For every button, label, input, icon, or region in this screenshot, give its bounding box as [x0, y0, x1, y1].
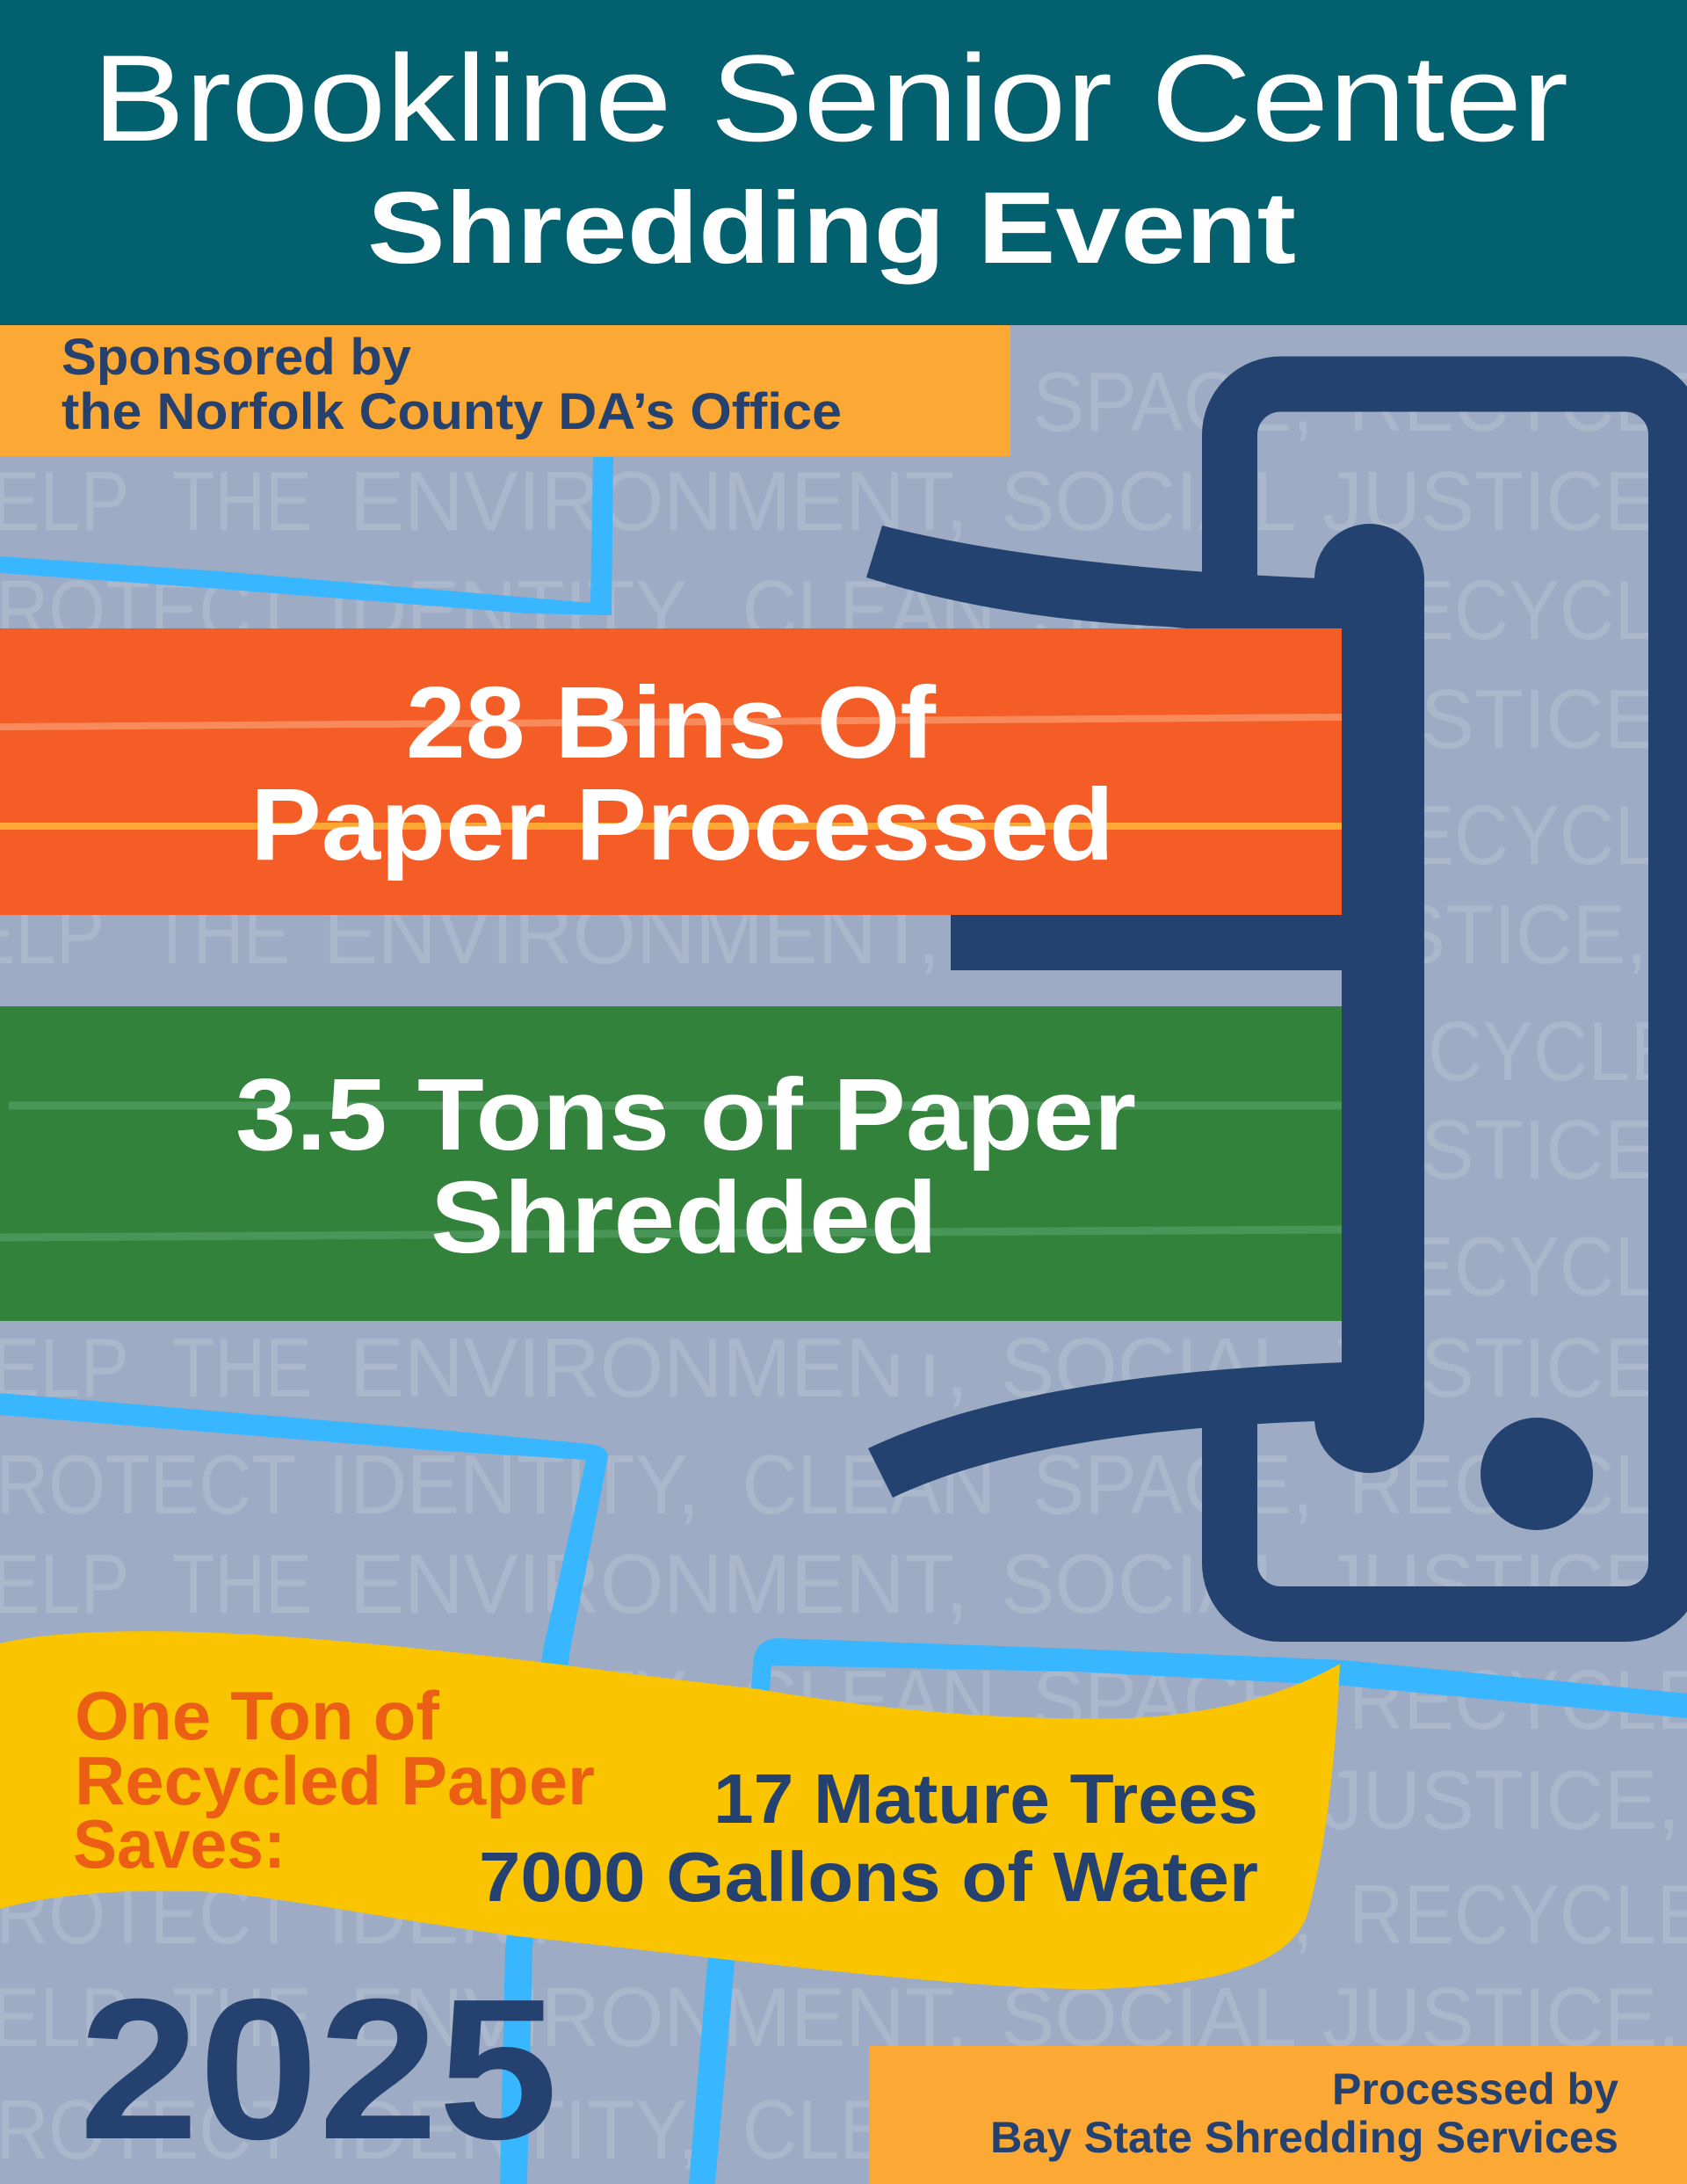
background slogan text pattern: ENVIRONMENT, — [350, 454, 968, 548]
title: Brookline Senior Center — [92, 29, 1568, 167]
background slogan text pattern: CLEAN — [742, 2083, 996, 2177]
stat panel: tons shredded: Shredded — [431, 1160, 938, 1274]
background slogan text pattern: CLEAN — [742, 1653, 996, 1747]
background slogan text pattern: IDENTITY, — [328, 1438, 699, 1532]
background slogan text pattern: ENVIRONMENT, — [350, 1537, 968, 1631]
shredder slot bar — [1314, 524, 1424, 1473]
background slogan text pattern: ENVIRONMENT, — [350, 1970, 968, 2064]
stat panel: bins of paper — [0, 628, 1342, 915]
banner heading: One Ton of — [75, 1677, 440, 1754]
background slogan text pattern: JUSTICE, — [1322, 1970, 1680, 2064]
background slogan text pattern: SOCIAL — [1001, 1537, 1297, 1631]
background slogan text pattern: JUSTICE, — [1322, 1537, 1680, 1631]
background slogan text pattern: THE — [172, 454, 312, 548]
subtitle: Shredding Event — [367, 171, 1296, 285]
banner savings figures — [479, 1760, 1258, 1916]
lower paper curl — [868, 1362, 1344, 1498]
sponsor panel: Sponsored by — [62, 329, 411, 386]
background slogan text pattern: SOCIAL — [1001, 1753, 1297, 1847]
background slogan text pattern: IDENTITY, — [328, 1653, 699, 1747]
background slogan text pattern: SOCIAL — [1001, 1321, 1297, 1415]
sponsor panel — [0, 325, 1010, 456]
background slogan text pattern: SPACE, — [1032, 1653, 1314, 1747]
background slogan text pattern: THE — [151, 888, 290, 982]
background slogan text pattern: JUSTICE, — [1322, 1753, 1680, 1847]
background slogan text pattern: CLEAN — [742, 1438, 996, 1532]
background slogan text pattern: CLEAN — [742, 1868, 996, 1962]
background slogan text pattern: ENVIRONMENT, — [323, 888, 940, 982]
background slogan text pattern: ENVIRONMENT, — [350, 1321, 968, 1415]
icon: paper shredder — [866, 384, 1676, 1614]
blue paper outlines — [0, 457, 1687, 2184]
background slogan text pattern: ENVIRONMENT, — [350, 1753, 968, 1847]
savings banner — [0, 1631, 1340, 1989]
stat panel: bins of paper: Paper Processed — [250, 767, 1114, 882]
banner heading — [73, 1677, 595, 1883]
background slogan text pattern: SOCIAL — [1001, 1970, 1297, 2064]
background slogan text pattern: SPACE, — [1032, 355, 1314, 449]
stat panel: tons shredded — [0, 1006, 1342, 1321]
background slogan text pattern: IDENTITY, — [328, 563, 699, 657]
stat panel: bins of paper: 28 Bins Of — [406, 665, 936, 780]
background slogan text pattern: THE — [172, 1970, 312, 2064]
background slogan text pattern: SPACE, — [1032, 1438, 1314, 1532]
banner savings figures: 7000 Gallons of Water — [479, 1838, 1258, 1916]
background slogan text pattern: THE — [172, 1537, 312, 1631]
background slogan text pattern: IDENTITY, — [328, 2083, 699, 2177]
processor panel: Processed by — [1332, 2064, 1618, 2114]
background slogan text pattern: SPACE, — [1032, 1868, 1314, 1962]
processor panel: Bay State Shredding Services — [990, 2113, 1618, 2162]
upper paper curl — [866, 526, 1318, 642]
shredder button — [1481, 1418, 1593, 1530]
banner savings figures: 17 Mature Trees — [713, 1760, 1258, 1838]
background slogan text pattern: THE — [172, 1753, 312, 1847]
background slogan text pattern: JUSTICE, — [1322, 672, 1680, 766]
banner heading: Saves: — [73, 1805, 286, 1883]
background slogan text pattern: CLEAN — [742, 563, 996, 657]
connector under red bar — [951, 914, 1342, 970]
background slogan text pattern: JUSTICE, — [1322, 454, 1680, 548]
background slogan text pattern: JUSTICE, — [1296, 888, 1647, 982]
background slogan text pattern: THE — [172, 1321, 312, 1415]
header band — [0, 0, 1687, 325]
banner heading: Recycled Paper — [75, 1742, 595, 1819]
processor panel — [869, 2046, 1687, 2184]
background slogan text pattern: IDENTITY, — [328, 1868, 699, 1962]
shredder body outline — [1230, 384, 1676, 1614]
background slogan text pattern: SPACE, — [1032, 563, 1314, 657]
stat panel: tons shredded: 3.5 Tons of Paper — [235, 1057, 1136, 1172]
background slogan text pattern: SOCIAL — [1001, 454, 1297, 548]
sponsor panel: the Norfolk County DA’s Office — [62, 383, 842, 440]
background slogan text pattern: JUSTICE, — [1322, 1321, 1680, 1415]
year: 2025 — [79, 1958, 558, 2181]
background slogan text pattern: JUSTICE, — [1322, 1103, 1680, 1197]
